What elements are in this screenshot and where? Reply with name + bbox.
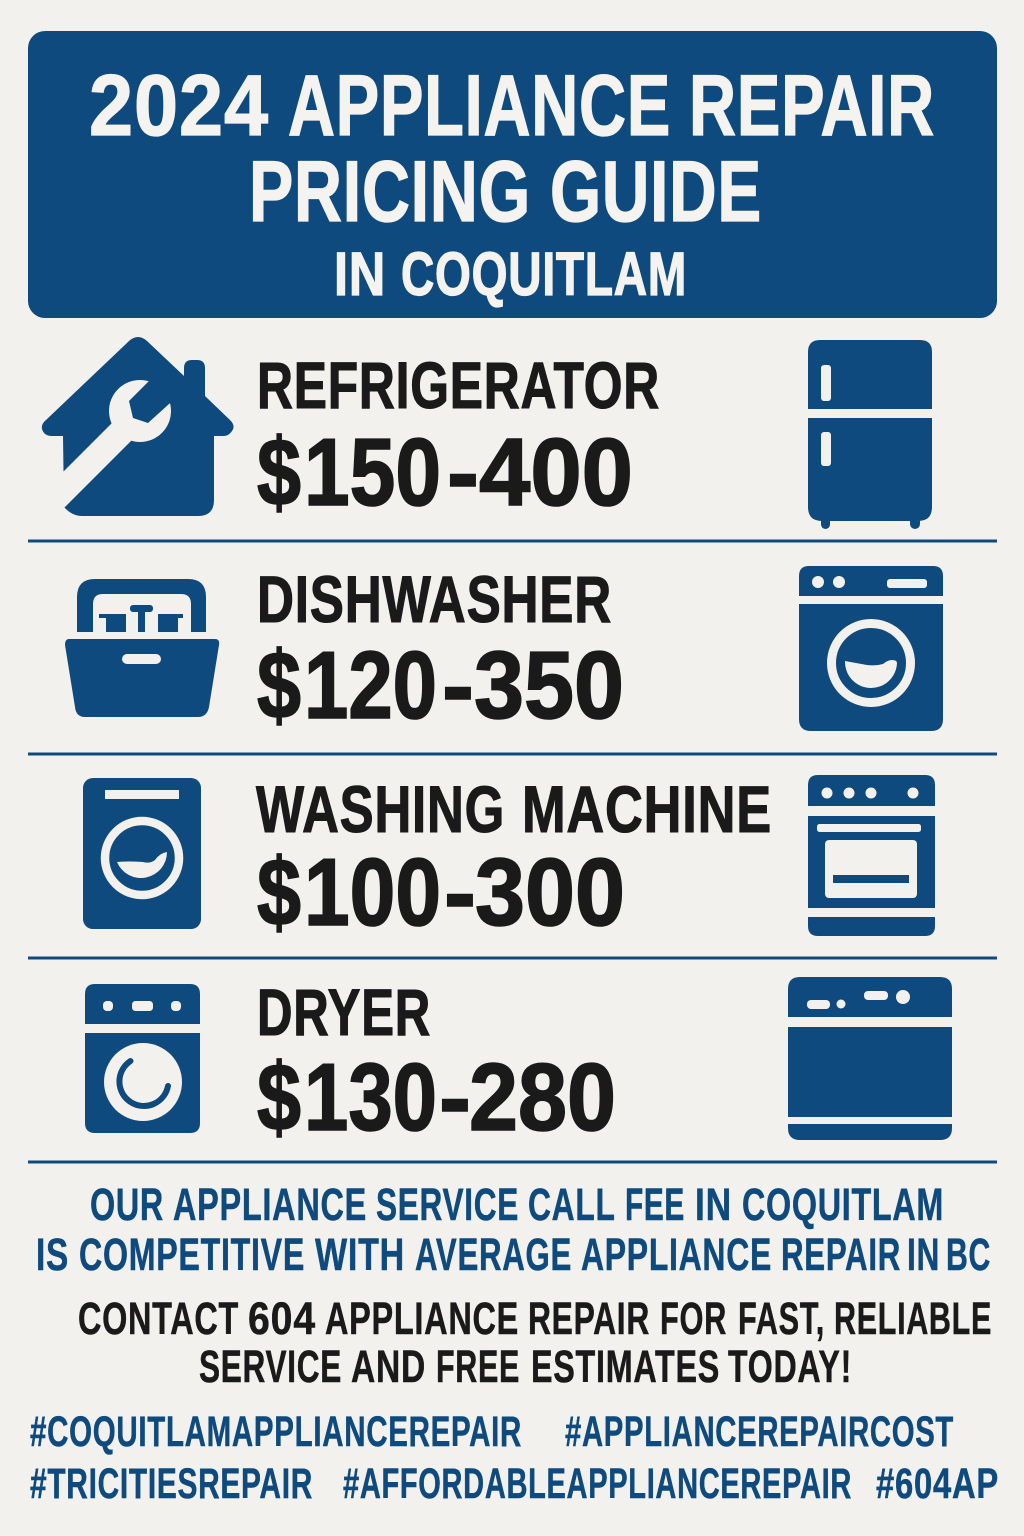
title: REPAIR bbox=[689, 58, 935, 154]
price: refrigerator: 150 bbox=[304, 419, 441, 526]
service call fee note: APPLIANCE bbox=[581, 1229, 772, 1280]
contact call to action: TODAY! bbox=[728, 1341, 852, 1392]
service call fee note: APPLIANCE bbox=[173, 1179, 367, 1230]
contact call to action: AND bbox=[351, 1341, 426, 1392]
label: dishwasher: DISHWASHER bbox=[257, 562, 612, 636]
title: PRICING bbox=[249, 144, 531, 240]
price: refrigerator: - bbox=[447, 419, 479, 526]
label: washing machine: MACHINE bbox=[522, 772, 772, 846]
service call fee note: FEE bbox=[625, 1179, 685, 1230]
service call fee note: IN bbox=[695, 1179, 732, 1230]
contact call to action bbox=[78, 1293, 992, 1392]
price: dryer: 130 bbox=[304, 1044, 437, 1151]
price: dishwasher: $ bbox=[257, 632, 301, 739]
service call fee note: IN bbox=[907, 1229, 940, 1280]
contact call to action: APPLIANCE bbox=[325, 1293, 519, 1344]
title: IN bbox=[334, 240, 386, 308]
contact call to action: CONTACT bbox=[78, 1293, 239, 1344]
row: dryer bbox=[85, 975, 952, 1151]
price: washing machine: 100 bbox=[304, 839, 441, 946]
service call fee note: COMPETITIVE bbox=[79, 1229, 305, 1280]
hashtags: #COQUITLAMAPPLIANCEREPAIR bbox=[30, 1409, 522, 1456]
service call fee note: OUR bbox=[90, 1179, 164, 1230]
icon: built-in oven bbox=[788, 977, 952, 1140]
header banner bbox=[28, 31, 997, 318]
service call fee note: CALL bbox=[528, 1179, 615, 1230]
price: dishwasher: 350 bbox=[474, 632, 624, 739]
contact call to action: FAST, bbox=[738, 1293, 825, 1344]
price: refrigerator: $ bbox=[257, 419, 301, 526]
price: dryer: 280 bbox=[469, 1044, 616, 1151]
service call fee note: AVERAGE bbox=[415, 1229, 572, 1280]
icon: washing machine bbox=[83, 778, 201, 929]
service call fee note: WITH bbox=[315, 1229, 405, 1280]
service call fee note: COQUITLAM bbox=[742, 1179, 944, 1230]
row: dishwasher bbox=[65, 562, 943, 739]
hashtags: #TRICITIESREPAIR bbox=[30, 1461, 313, 1508]
contact call to action: FREE bbox=[436, 1341, 520, 1392]
price: dishwasher: - bbox=[442, 632, 474, 739]
contact call to action: SERVICE bbox=[199, 1341, 342, 1392]
price: dishwasher: 120 bbox=[304, 632, 437, 739]
price: washing machine: - bbox=[444, 839, 476, 946]
contact call to action: REPAIR bbox=[528, 1293, 650, 1344]
row: washing machine bbox=[83, 772, 935, 946]
service call fee note bbox=[36, 1179, 991, 1280]
price: dryer: $ bbox=[257, 1044, 301, 1151]
label: refrigerator: REFRIGERATOR bbox=[257, 348, 660, 422]
service call fee note: SERVICE bbox=[376, 1179, 519, 1230]
title: COQUITLAM bbox=[401, 240, 687, 308]
title: APPLIANCE bbox=[288, 58, 671, 154]
label: washing machine: WASHING bbox=[256, 772, 505, 846]
icon: house with wrench bbox=[25, 337, 234, 516]
row: refrigerator bbox=[25, 337, 932, 529]
icon: dryer bbox=[85, 984, 200, 1133]
icon: front-load washer bbox=[799, 566, 943, 731]
icon: oven bbox=[808, 775, 935, 936]
contact call to action: ESTIMATES bbox=[531, 1341, 720, 1392]
hashtags bbox=[30, 1409, 999, 1508]
title: 2024 bbox=[89, 58, 269, 154]
service call fee note: IS bbox=[36, 1229, 69, 1280]
service call fee note: BC bbox=[946, 1229, 991, 1280]
price: dryer: - bbox=[439, 1044, 471, 1151]
title: GUIDE bbox=[550, 144, 762, 240]
icon: dishwasher rack bbox=[65, 579, 219, 717]
service call fee note: REPAIR bbox=[781, 1229, 901, 1280]
price: washing machine: $ bbox=[257, 839, 301, 946]
price: washing machine: 300 bbox=[475, 839, 625, 946]
icon: refrigerator bbox=[808, 340, 932, 529]
contact call to action: FOR bbox=[660, 1293, 727, 1344]
label: dryer: DRYER bbox=[257, 975, 431, 1049]
contact call to action: 604 bbox=[248, 1293, 316, 1344]
title bbox=[89, 58, 935, 308]
price: refrigerator: 400 bbox=[479, 419, 633, 526]
